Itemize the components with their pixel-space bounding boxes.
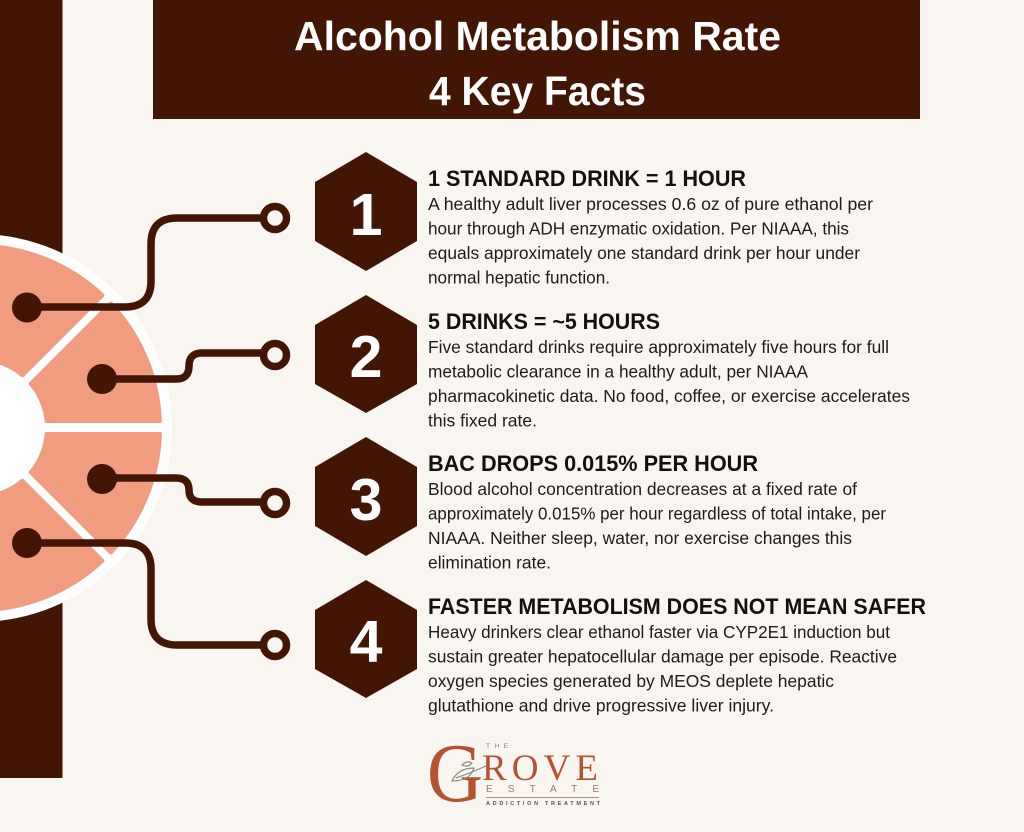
- fact 3: elimination rate.: [428, 552, 551, 572]
- fact 2: Five standard drinks require approximately five hours for full: [428, 337, 889, 357]
- fact 3: approximately 0.015% per hour regardless of total intake, per: [428, 504, 886, 524]
- fact 2: 5 DRINKS = ~5 HOURS: [428, 309, 660, 334]
- fact 4: FASTER METABOLISM DOES NOT MEAN SAFER: [428, 594, 926, 619]
- logo: The Grove Estate: [427, 727, 601, 820]
- fact 3: Blood alcohol concentration decreases at a fixed rate of: [428, 479, 857, 499]
- fact 1: hour through ADH enzymatic oxidation. Per NIAAA, this: [428, 218, 849, 238]
- fact 4: Heavy drinkers clear ethanol faster via CYP2E1 induction but: [428, 622, 890, 642]
- title banner: 4 Key Facts: [429, 68, 646, 114]
- fact 1: equals approximately one standard drink per hour under: [428, 243, 860, 263]
- fact 2: pharmacokinetic data. No food, coffee, or exercise accelerates: [428, 386, 910, 406]
- title banner: [153, 0, 920, 119]
- logo: The Grove Estate: THE: [486, 743, 509, 750]
- connector 1: [12, 206, 286, 322]
- title banner: Alcohol Metabolism Rate: [294, 13, 781, 59]
- fact 3: [428, 451, 886, 572]
- fact 1: A healthy adult liver processes 0.6 oz of pure ethanol per: [428, 194, 873, 214]
- hexagon badge 4: [315, 580, 417, 698]
- hexagon badge 4: 4: [350, 609, 383, 675]
- fact 3: NIAAA. Neither sleep, water, nor exercise changes this: [428, 528, 852, 548]
- connector 2: [87, 344, 286, 394]
- fact 4: [428, 594, 926, 716]
- logo: The Grove Estate: ADDICTION TREATMENT: [486, 801, 601, 807]
- fact 4: glutathione and drive progressive liver injury.: [428, 696, 774, 716]
- left vertical bar: [0, 0, 62, 778]
- fact 4: sustain greater hepatocellular damage per episode. Reactive: [428, 646, 897, 666]
- logo: The Grove Estate: ESTATE: [486, 784, 599, 795]
- segmented wheel: [0, 234, 172, 622]
- logo: The Grove Estate: ROVE: [482, 748, 598, 789]
- logo: The Grove Estate: G: [427, 727, 483, 820]
- hexagon badge 1: [315, 152, 417, 271]
- connector 4: [12, 528, 286, 656]
- fact 4: oxygen species generated by MEOS deplete hepatic: [428, 671, 834, 691]
- hexagon badge 3: 3: [350, 467, 382, 533]
- fact 2: this fixed rate.: [428, 410, 537, 430]
- hexagon badge 1: 1: [350, 182, 382, 248]
- hexagon badge 2: [315, 295, 417, 413]
- connector 3: [87, 464, 286, 514]
- fact 1: normal hepatic function.: [428, 268, 610, 288]
- fact 1: 1 STANDARD DRINK = 1 HOUR: [428, 166, 746, 191]
- fact 2: metabolic clearance in a healthy adult, per NIAAA: [428, 362, 808, 382]
- hexagon badge 2: 2: [350, 324, 382, 390]
- hexagon badge 3: [315, 437, 417, 556]
- fact 2: [428, 309, 910, 430]
- fact 3: BAC DROPS 0.015% PER HOUR: [428, 451, 758, 476]
- fact 1: [428, 166, 873, 288]
